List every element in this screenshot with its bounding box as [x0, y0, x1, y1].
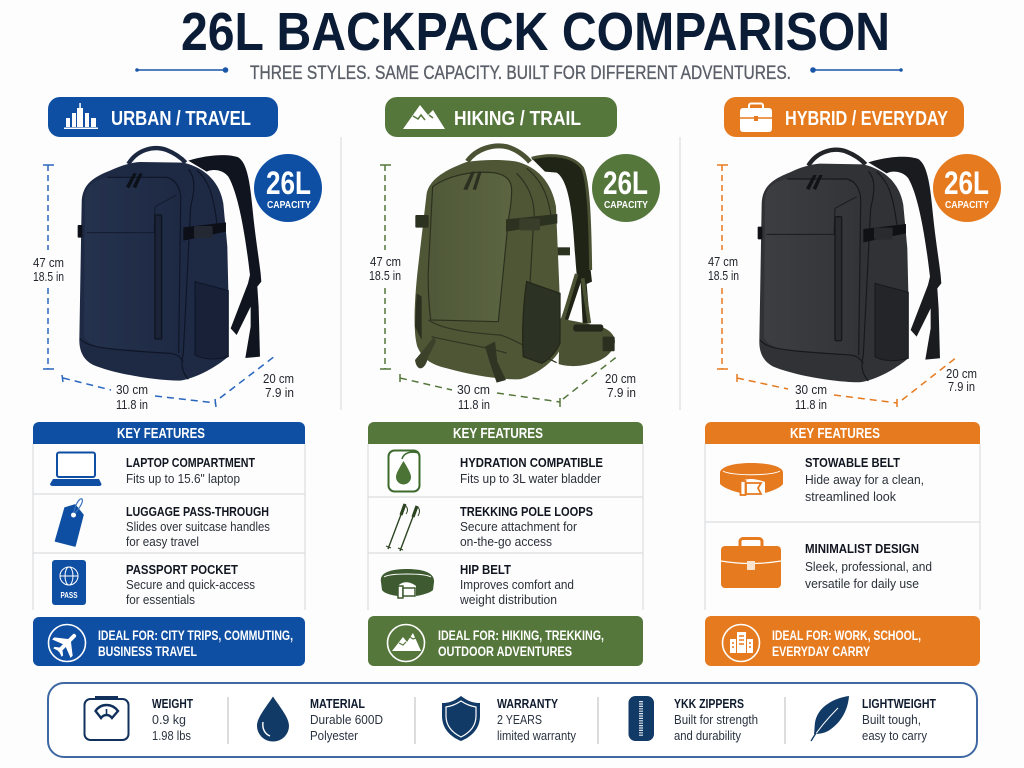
callout: hiking ideal for: IDEAL FOR: HIKING, TREKKING, [438, 628, 604, 643]
panel: urban key features: KEY FEATURES [117, 425, 205, 442]
icon: stowable belt [720, 463, 783, 495]
heading: urban travel [48, 97, 278, 137]
dimensions: hiking: 18.5 in [369, 269, 401, 283]
callout: hybrid ideal for: EVERYDAY CARRY [772, 644, 870, 659]
dimensions: hybrid: 20 cm [946, 367, 977, 381]
icon: airplane [48, 624, 86, 662]
feature: hip belt: weight distribution [459, 593, 557, 607]
spec: material [310, 696, 383, 743]
dimensions: urban: 30 cm [116, 383, 148, 397]
spec: lightweight [862, 696, 936, 743]
callout: urban ideal for [33, 617, 305, 666]
heading: hybrid everyday [724, 97, 964, 137]
feature: minimalist design: Sleek, professional, and [805, 560, 932, 574]
feature: passport pocket [126, 562, 255, 607]
dimensions: hybrid: 18.5 in [708, 269, 739, 283]
spec: weight [152, 696, 193, 743]
dimensions: hybrid [708, 165, 977, 412]
feature: hip belt: HIP BELT [460, 562, 511, 577]
feature: minimalist design: MINIMALIST DESIGN [805, 541, 919, 556]
dimensions: urban: 18.5 in [33, 270, 64, 284]
spec: warranty: limited warranty [497, 729, 577, 743]
heading: hybrid everyday: HYBRID / EVERYDAY [785, 108, 949, 130]
dimensions: hiking: 7.9 in [607, 386, 636, 400]
icon: briefcase [740, 104, 772, 132]
feature: hip belt: Improves comfort and [460, 578, 574, 592]
feature: trekking pole loops [460, 504, 593, 549]
feature: luggage pass-through: LUGGAGE PASS-THROUGH [126, 504, 269, 519]
callout: urban ideal for: BUSINESS TRAVEL [98, 644, 197, 659]
feature: stowable belt: Hide away for a clean, [805, 473, 924, 487]
icon: feather [811, 696, 849, 741]
feature: hip belt [459, 562, 574, 607]
icon: briefcase [721, 538, 781, 588]
callout: hybrid ideal for: IDEAL FOR: WORK, SCHOOL, [772, 628, 921, 643]
dimensions: hybrid: 11.8 in [795, 398, 827, 412]
backpack: charcoal hybrid [758, 150, 941, 382]
heading: hiking trail: HIKING / TRAIL [454, 108, 581, 130]
feature: passport pocket: for essentials [126, 593, 195, 607]
spec: warranty [497, 696, 577, 743]
icon: zipper [628, 696, 654, 741]
badge: 26L hybrid [933, 154, 1001, 222]
feature: trekking pole loops: on-the-go access [460, 535, 552, 549]
spec: weight: 1.98 lbs [152, 729, 191, 743]
feature: laptop compartment [126, 455, 255, 486]
panel: urban key features [33, 422, 305, 610]
subtitle: THREE STYLES. SAME CAPACITY. BUILT FOR DIFFERENT ADVENTURES. [250, 63, 791, 84]
dimensions: hybrid: 47 cm [708, 255, 738, 269]
icon: laptop [50, 452, 102, 486]
feature: luggage pass-through: for easy travel [126, 535, 199, 549]
dimensions: hiking [369, 165, 636, 412]
spec: ykk zippers [674, 696, 758, 743]
spec: material: Polyester [310, 729, 358, 743]
backpack: green hiking [415, 146, 615, 383]
spec: ykk zippers: and durability [674, 729, 742, 743]
heading: hiking trail [385, 97, 617, 137]
dimensions: hybrid: 7.9 in [948, 380, 975, 394]
spec: warranty: WARRANTY [497, 696, 558, 711]
feature: passport pocket: PASSPORT POCKET [126, 562, 238, 577]
icon: water drop [257, 696, 289, 741]
feature: hydration compatible: Fits up to 3L water bladder [460, 472, 601, 486]
panel: shared specifications [48, 683, 977, 757]
badge: 26L hybrid: 26L [944, 165, 989, 201]
icon: luggage tag [56, 499, 83, 546]
panel: hybrid key features: KEY FEATURES [790, 425, 880, 442]
icon: passport: PASS [60, 590, 78, 600]
backpack: navy urban [78, 148, 261, 381]
icon: hip belt [381, 569, 434, 598]
feature: stowable belt: streamlined look [805, 490, 897, 504]
callout: hiking ideal for: OUTDOOR ADVENTURES [438, 644, 572, 659]
icon: water bladder [388, 450, 420, 492]
dimensions: hiking: 20 cm [605, 372, 636, 386]
callout: hiking ideal for [368, 616, 643, 666]
spec: weight: 0.9 kg [152, 713, 186, 727]
spec: material: Durable 600D [310, 713, 383, 727]
spec: ykk zippers: YKK ZIPPERS [674, 696, 744, 711]
spec: ykk zippers: Built for strength [674, 713, 758, 727]
badge: 26L hybrid: CAPACITY [945, 199, 989, 211]
feature: trekking pole loops: TREKKING POLE LOOPS [460, 504, 593, 519]
feature: luggage pass-through [126, 504, 270, 549]
dimensions: hiking: 11.8 in [458, 398, 490, 412]
spec: material: MATERIAL [310, 696, 365, 711]
badge: 26L urban: CAPACITY [267, 199, 311, 211]
feature: stowable belt: STOWABLE BELT [805, 455, 900, 470]
dimensions: urban [33, 165, 294, 412]
spec: weight: WEIGHT [152, 696, 193, 711]
badge: 26L hiking: 26L [603, 165, 648, 201]
dimensions: urban: 11.8 in [116, 398, 148, 412]
badge: 26L hiking: CAPACITY [604, 199, 648, 211]
feature: trekking pole loops: Secure attachment for [460, 520, 577, 534]
icon: mountains [403, 105, 445, 129]
icon: city skyline [64, 103, 98, 129]
icon: trekking poles [386, 504, 420, 551]
feature: passport pocket: Secure and quick-access [126, 578, 255, 592]
spec: lightweight: Built tough, [862, 713, 921, 727]
feature: stowable belt [805, 455, 924, 504]
dimensions: hiking: 47 cm [370, 255, 401, 269]
icon: mountain circle [388, 624, 424, 662]
icon: passport [52, 560, 86, 605]
spec: lightweight: LIGHTWEIGHT [862, 696, 936, 711]
heading: urban travel: URBAN / TRAVEL [111, 108, 251, 130]
feature: hydration compatible: HYDRATION COMPATIBLE [460, 455, 603, 470]
feature: laptop compartment: Fits up to 15.6" laptop [126, 472, 240, 486]
callout: urban ideal for: IDEAL FOR: CITY TRIPS, COMMUTING, [98, 628, 293, 643]
feature: hydration compatible [460, 455, 603, 486]
badge: 26L hiking [592, 154, 660, 222]
feature: luggage pass-through: Slides over suitcase handles [126, 520, 270, 534]
icon: buildings circle [722, 624, 760, 662]
feature: laptop compartment: LAPTOP COMPARTMENT [126, 455, 255, 470]
title: 26L BACKPACK COMPARISON [181, 2, 890, 62]
feature: minimalist design [805, 541, 932, 591]
spec: lightweight: easy to carry [862, 729, 928, 743]
icon: shield [442, 696, 480, 741]
dimensions: hybrid: 30 cm [795, 383, 827, 397]
spec: warranty: 2 YEARS [497, 713, 542, 727]
badge: 26L urban [254, 154, 322, 222]
dimensions: urban: 7.9 in [265, 386, 294, 400]
dimensions: urban: 20 cm [263, 372, 294, 386]
dimensions: urban: 47 cm [33, 256, 64, 270]
panel: hybrid key features [705, 422, 980, 610]
icon: scale [84, 697, 128, 740]
dimensions: hiking: 30 cm [457, 383, 490, 397]
panel: hiking key features [368, 422, 643, 610]
badge: 26L urban: 26L [266, 165, 311, 201]
feature: minimalist design: versatile for daily use [805, 577, 919, 591]
panel: hiking key features: KEY FEATURES [453, 425, 543, 442]
callout: hybrid ideal for [705, 616, 980, 666]
